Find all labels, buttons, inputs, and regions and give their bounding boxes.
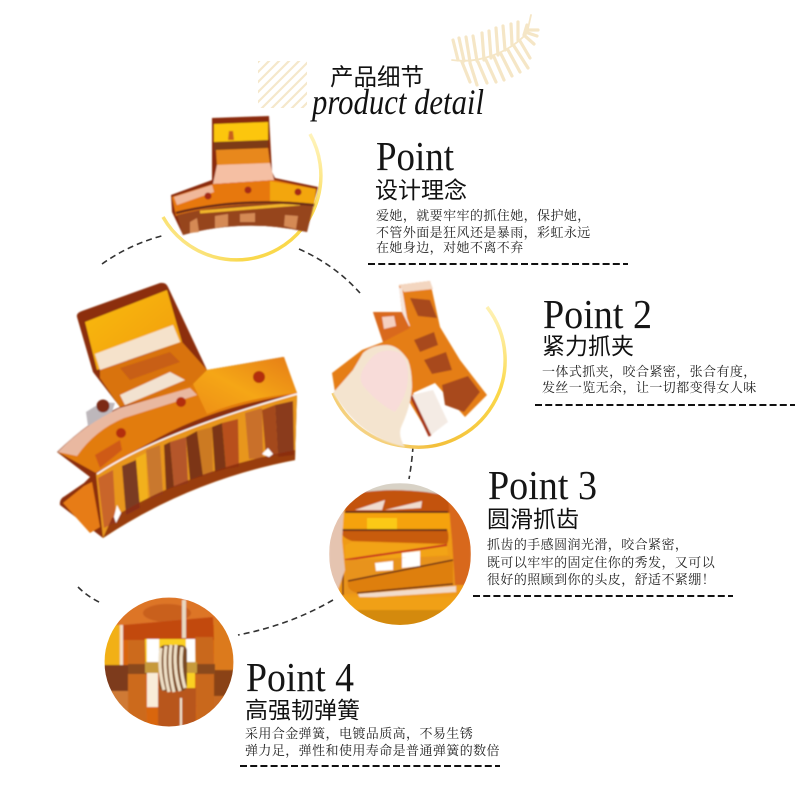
text block: point 4: 高强韧弹簧 bbox=[245, 697, 360, 723]
dashed connector lines bbox=[78, 235, 413, 635]
text block: point 2 bbox=[535, 291, 795, 405]
clip photo 1 bbox=[171, 116, 318, 235]
panel: main clip photo bbox=[57, 283, 297, 538]
text block: point 4: Point 4 bbox=[246, 654, 354, 700]
text block: point 2: 一体式抓夹，咬合紧密，张合有度， bbox=[542, 364, 757, 380]
knob bbox=[86, 402, 115, 426]
panel: clip detail 3 bbox=[329, 483, 471, 626]
yellow ring 1 bbox=[163, 134, 321, 260]
text block: point 3: 抓齿的手感圆润光滑，咬合紧密， bbox=[487, 537, 688, 553]
text block: point 1: Point bbox=[376, 133, 455, 179]
text block: point 1: 不管外面是狂风还是暴雨，彩虹永远 bbox=[376, 225, 591, 241]
text block: point 4: 采用合金弹簧，电镀品质高，不易生锈 bbox=[245, 726, 473, 742]
front wall teeth bbox=[96, 394, 297, 538]
text block: point 2: Point 2 bbox=[543, 291, 652, 337]
text block: point 4 bbox=[240, 654, 500, 766]
text block: point 3: 既可以牢牢的固定住你的秀发，又可以 bbox=[487, 555, 716, 571]
yellow ring 2 bbox=[333, 307, 505, 447]
clip photo 2 bbox=[332, 281, 487, 447]
text block: point 1: 在她身边，对她不离不弃 bbox=[376, 240, 524, 256]
decoration: palm leaf bbox=[452, 15, 538, 85]
front arm top bbox=[58, 357, 297, 473]
text block: point 1: 设计理念 bbox=[375, 177, 467, 203]
title: product detail bbox=[309, 82, 484, 122]
title: 产品细节 bbox=[330, 64, 424, 90]
back tab bbox=[85, 290, 182, 370]
text block: point 1 bbox=[368, 133, 628, 264]
text block: point 3: 圆滑抓齿 bbox=[487, 506, 579, 532]
panel: clip detail 4 bbox=[104, 597, 234, 730]
text block: point 3: 很好的照顾到你的头皮，舒适不紧绷！ bbox=[487, 572, 715, 588]
text block: point 3: Point 3 bbox=[488, 462, 597, 508]
rivets bbox=[116, 371, 265, 438]
text block: point 1: 爱她，就要牢牢的抓住她，保护她， bbox=[376, 208, 591, 224]
thumb bbox=[333, 345, 412, 447]
text block: point 2: 发丝一览无余，让一切都变得女人味 bbox=[542, 380, 757, 396]
text block: point 3 bbox=[473, 462, 733, 596]
panel: clip detail 2 bbox=[332, 281, 505, 447]
text block: point 2: 紧力抓夹 bbox=[542, 333, 634, 359]
lower tab bbox=[63, 482, 100, 533]
decoration: striped square bbox=[258, 61, 307, 108]
clip silhouette bbox=[57, 283, 297, 538]
text block: point 4: 弹力足，弹性和使用寿命是普通弹簧的数倍 bbox=[245, 743, 500, 759]
panel: clip detail 1 bbox=[163, 116, 321, 260]
title bbox=[309, 64, 484, 122]
